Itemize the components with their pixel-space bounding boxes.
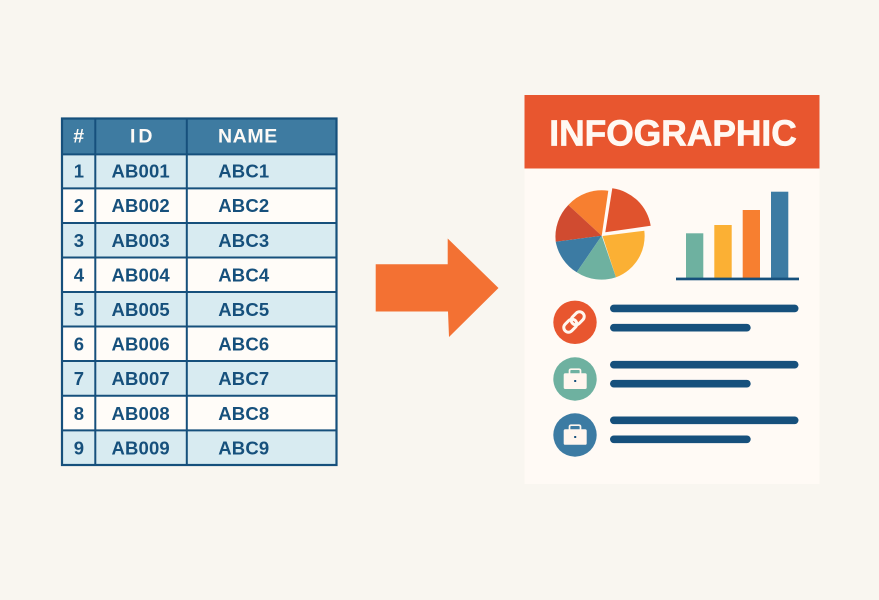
- row numbers: 8: [74, 403, 84, 424]
- NAME column: ABC9: [218, 437, 269, 458]
- text lines: [610, 361, 798, 388]
- row numbers: 5: [74, 299, 84, 320]
- NAME column: ABC4: [218, 264, 270, 285]
- row numbers: 3: [74, 230, 84, 251]
- table row backgrounds: [62, 154, 336, 465]
- row numbers: [74, 161, 85, 458]
- row numbers: 9: [74, 437, 84, 458]
- ID column: AB001: [112, 161, 170, 182]
- NAME column: ABC1: [218, 161, 269, 182]
- title banner: INFOGRAPHIC: [549, 113, 797, 154]
- icon: link: [553, 301, 597, 344]
- icon: briefcase: [553, 413, 597, 457]
- text lines: [610, 305, 798, 332]
- arrow: [376, 238, 498, 337]
- data table: [62, 118, 336, 465]
- table header row: NAME: [218, 126, 278, 148]
- NAME column: ABC6: [218, 334, 269, 355]
- ID column: AB006: [112, 334, 170, 355]
- row numbers: 4: [74, 264, 85, 285]
- row numbers: 2: [74, 195, 84, 216]
- ID column: AB005: [112, 299, 170, 320]
- table header row: #: [73, 126, 85, 148]
- list item 1: [553, 301, 798, 344]
- ID column: [112, 161, 170, 458]
- infographic card: [524, 95, 820, 484]
- NAME column: ABC8: [218, 403, 269, 424]
- pie chart: [555, 188, 651, 280]
- ID column: AB004: [112, 264, 170, 285]
- table header row: [62, 118, 336, 154]
- list item 2: [553, 357, 798, 401]
- NAME column: [218, 161, 270, 458]
- icon: briefcase: [553, 357, 597, 401]
- ID column: AB007: [112, 368, 170, 389]
- NAME column: ABC7: [218, 368, 269, 389]
- row numbers: 7: [74, 368, 84, 389]
- NAME column: ABC2: [218, 195, 269, 216]
- NAME column: ABC3: [218, 230, 269, 251]
- NAME column: ABC5: [218, 299, 269, 320]
- ID column: AB008: [112, 403, 170, 424]
- ID column: AB009: [112, 437, 170, 458]
- table header row: ID: [130, 126, 156, 148]
- row numbers: 6: [74, 334, 84, 355]
- text lines: [610, 416, 798, 443]
- ID column: AB003: [112, 230, 170, 251]
- title banner: [524, 95, 820, 168]
- ID column: AB002: [112, 195, 170, 216]
- row numbers: 1: [74, 161, 84, 182]
- bar chart: [676, 192, 799, 280]
- list item 3: [553, 413, 798, 457]
